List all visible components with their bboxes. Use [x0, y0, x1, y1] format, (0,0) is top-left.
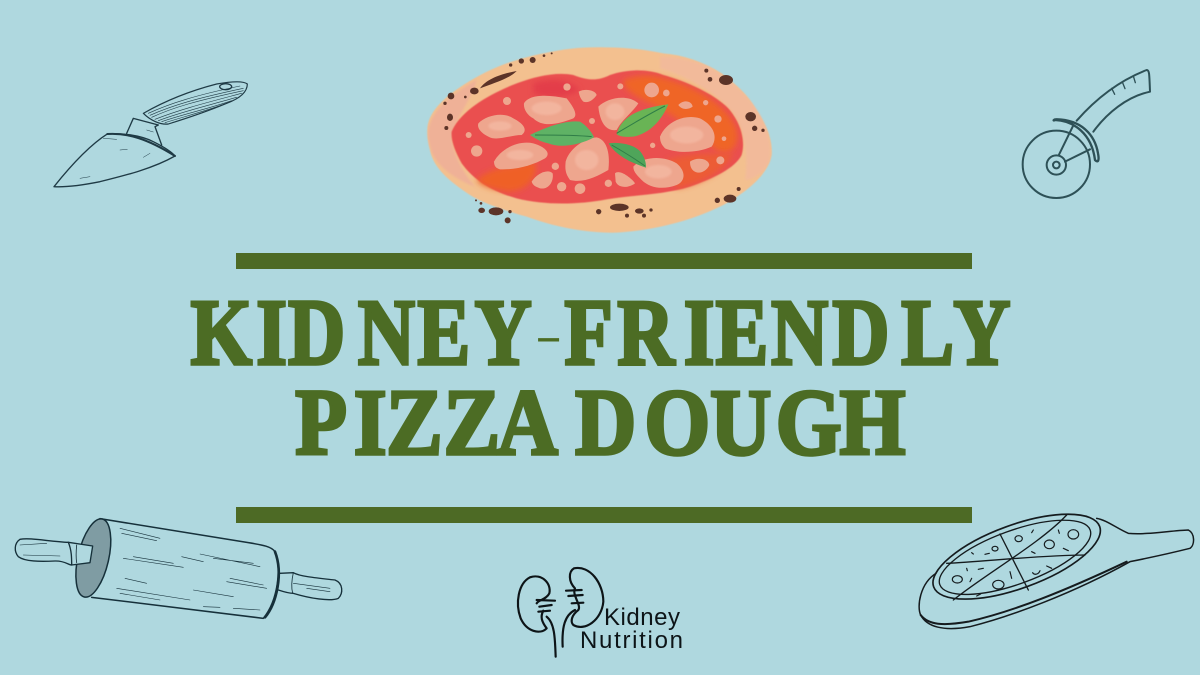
logo kidneys: [518, 568, 603, 657]
bottom green rule: [236, 507, 972, 523]
icon: rolling pin: [15, 516, 342, 618]
icon: pizza cutter: [1023, 70, 1150, 198]
tomato sauce: [452, 70, 743, 203]
title line 1: FRIENDLY: FRIENDLY: [564, 281, 1010, 385]
logo wordmark: [580, 604, 683, 654]
icon: pizza illustration: [427, 47, 772, 233]
title line 2: PIZZA DOUGH: [0, 371, 905, 475]
icon: pie server: [54, 82, 247, 187]
logo wordmark: Nutrition: [580, 627, 683, 654]
top green rule: [236, 253, 972, 269]
basil leaves: [530, 104, 668, 168]
logo: Kidney Nutrition: [518, 568, 683, 657]
crust pink shading: [428, 80, 477, 187]
title hyphen: -: [535, 314, 562, 358]
sauce orange wash: [623, 76, 737, 152]
pizza crust: [427, 47, 772, 233]
logo wordmark: Kidney: [604, 604, 680, 631]
icon: pizza on wooden peel: [919, 497, 1194, 629]
charred spots: [443, 52, 765, 223]
title: [0, 281, 1010, 475]
mozzarella pieces: [466, 83, 726, 194]
title line 1: KIDNEY: KIDNEY: [191, 281, 532, 385]
mozzarella highlights: [488, 102, 703, 178]
